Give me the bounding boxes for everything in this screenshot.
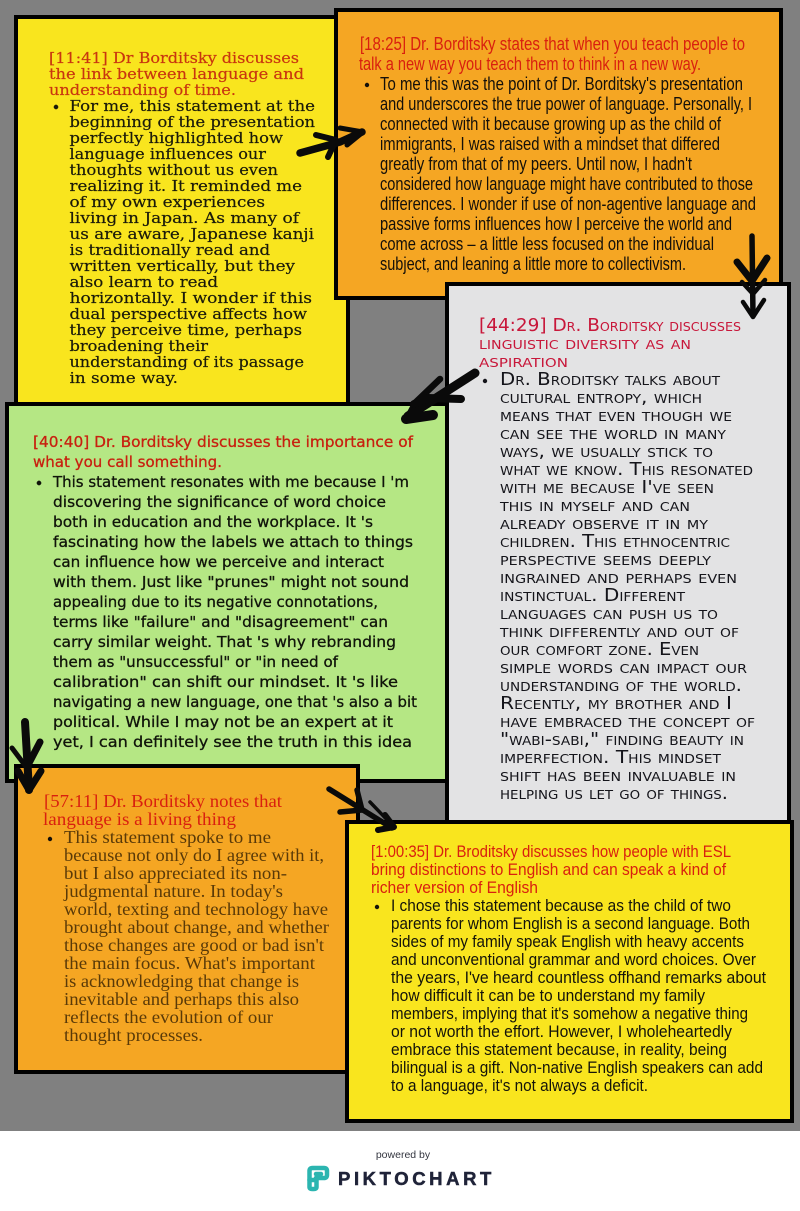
- heading: 11:41: [49, 49, 304, 99]
- text block: 18:25 reflection: [365, 74, 756, 274]
- text block: 18:25 reflection: subject, and leaning a little more to collectivism.: [380, 254, 686, 274]
- text block: 18:25 reflection: greatly from that of my peers. Until now, I hadn't: [380, 154, 692, 174]
- text block: 44:29 reflection: "wabi-sabi," finding beauty in: [500, 730, 744, 750]
- text block: 44:29 reflection: with me because I've seen: [500, 478, 714, 498]
- text block: 44:29 reflection: languages can push us to: [500, 604, 718, 624]
- text block: 44:29 reflection: perspective seems deeply: [500, 550, 712, 570]
- text block: 11:41 reflection: also learn to read: [70, 273, 218, 291]
- text block: 44:29 reflection: instinctual. Different: [500, 586, 686, 606]
- heading: 18:25: [359, 34, 745, 74]
- text block: 57:11 reflection: world, texting and technology have: [64, 899, 328, 919]
- text block: 44:29 reflection: understanding of the world.: [500, 676, 742, 696]
- heading: 1:00:35: bring distinctions to English and can speak a kind of: [371, 860, 726, 879]
- heading: 40:40: [40:40] Dr. Borditsky discusses the importance of: [33, 433, 414, 451]
- text block: 40:40 reflection: carry similar weight. That 's why rebranding: [53, 633, 396, 651]
- text block: 57:11 reflection: is acknowledging that change is: [64, 971, 299, 991]
- text block: 18:25 reflection: connected with it because growing up as the child of: [380, 114, 722, 134]
- text block: 11:41 reflection: us are aware, Japanese kanji: [70, 225, 314, 243]
- text block: 1:00:35 reflection: [375, 896, 766, 1095]
- text block: 57:11 reflection: This statement spoke to me: [64, 827, 271, 847]
- text block: 44:29 reflection: [483, 370, 755, 804]
- text block: 40:40 reflection: navigating a new language, one that 's also a bit: [53, 693, 417, 711]
- panel: 40:40 importance of naming: [7, 404, 447, 781]
- text block: 44:29 reflection: our comfort zone. Even: [500, 640, 699, 660]
- heading: 1:00:35: [1:00:35] Dr. Broditsky discusses how people with ESL: [371, 842, 731, 861]
- text block: 44:29 reflection: simple words can impact our: [500, 658, 747, 678]
- text block: 40:40 reflection: fascinating how the labels we attach to things: [53, 533, 413, 551]
- text block: 44:29 reflection: imperfection. This mindset: [500, 748, 722, 768]
- text block: 18:25 reflection: passive forms influences how I perceive the world and: [380, 214, 732, 234]
- text block: 57:11 reflection: brought about change, and whether: [64, 917, 329, 937]
- heading: 44:29: [44:29] Dr. Borditsky discusses: [479, 316, 741, 336]
- heading: 1:00:35: [371, 842, 731, 897]
- heading: 40:40: [33, 433, 414, 471]
- text block: 40:40 reflection: terms like "failure" and "disagreement" can: [53, 613, 388, 631]
- text block: 40:40 reflection: with them. Just like "prunes" might not sound: [53, 573, 409, 591]
- panel: 44:29 linguistic diversity: [447, 284, 789, 824]
- text block: 44:29 reflection: ingrained and perhaps even: [500, 568, 737, 588]
- text block: 40:40 reflection: This statement resonates with me because I 'm: [52, 473, 409, 491]
- heading: 44:29: aspiration: [479, 352, 568, 372]
- text block: 11:41 reflection: written vertically, but they: [70, 257, 296, 275]
- text block: 18:25 reflection: come across – a little less focused on the individual: [380, 234, 714, 254]
- text block: 18:25 reflection: immigrants, I was raised with a mindset that differed: [380, 134, 720, 154]
- text block: 57:11 reflection: inevitable and perhaps this also: [64, 989, 299, 1009]
- panel: 57:11 language is a living thing: [16, 766, 358, 1072]
- text block: 44:29 reflection: have embraced the concept of: [500, 712, 755, 732]
- text block: 11:41 reflection: language influences our: [70, 145, 267, 163]
- text block: 11:41 reflection: dual perspective affects how: [70, 305, 307, 323]
- text block: 57:11 reflection: those changes are good or bad isn't: [64, 935, 324, 955]
- text block: 1:00:35 reflection: to a language, it's not always a deficit.: [391, 1076, 648, 1095]
- text block: 11:41 reflection: understanding of its passage: [70, 353, 304, 371]
- text block: 11:41 reflection: For me, this statement at the: [70, 97, 315, 115]
- icon: Piktochart logo: [310, 1168, 327, 1189]
- heading: 57:11: [43, 791, 282, 829]
- arrow: orange panel to yellow panel: [329, 789, 394, 830]
- text block: 40:40 reflection: [37, 473, 417, 751]
- footer text: powered by: powered by: [376, 1149, 431, 1161]
- text block: 40:40 reflection: political. While I may not be an expert at it: [53, 713, 393, 731]
- text block: 1:00:35 reflection: sides of my family speak English with heavy accents: [391, 932, 744, 951]
- text block: 11:41 reflection: beginning of the presentation: [70, 113, 315, 131]
- panel: 1:00:35 ESL speakers: [347, 822, 792, 1121]
- text block: 40:40 reflection: them as "unsuccessful" or "in need of: [53, 653, 339, 671]
- heading: 40:40: what you call something.: [33, 453, 222, 471]
- text block: 40:40 reflection: appealing due to its negative connotations,: [53, 593, 378, 611]
- heading: 11:41: [11:41] Dr Borditsky discusses: [49, 49, 299, 67]
- heading: 57:11: language is a living thing: [43, 809, 236, 829]
- text block: 57:11 reflection: thought processes.: [64, 1025, 203, 1045]
- arrow: yellow panel to orange panel: [300, 128, 363, 157]
- wordmark: Piktochart: PIKTOCHART: [338, 1168, 495, 1189]
- text block: 57:11 reflection: [48, 827, 329, 1045]
- text block: 40:40 reflection: can influence how we perceive and interact: [53, 553, 384, 571]
- text block: 44:29 reflection: children. This ethnocentric: [500, 532, 730, 552]
- text block: 40:40 reflection: calibration" can shift our mindset. It 's like: [53, 673, 398, 691]
- heading: 44:29: [479, 316, 741, 372]
- text block: 40:40 reflection: discovering the significance of word choice: [53, 493, 386, 511]
- text block: 1:00:35 reflection: or not worth the effort. However, I wholeheartedly: [391, 1022, 732, 1041]
- text block: 11:41 reflection: in some way.: [70, 369, 178, 387]
- heading: 1:00:35: richer version of English: [371, 878, 538, 897]
- text block: 1:00:35 reflection: bilingual is a gift. Non-native English speakers can add: [391, 1058, 763, 1077]
- text block: 57:11 reflection: reflects the evolution of our: [64, 1007, 273, 1027]
- text block: 11:41 reflection: is traditionally read and: [70, 241, 270, 259]
- text block: 44:29 reflection: can see the world in many: [500, 424, 727, 444]
- text block: 57:11 reflection: because not only do I agree with it,: [64, 845, 324, 865]
- text block: 1:00:35 reflection: parents for whom English is a second language. Both: [391, 914, 750, 933]
- text block: 44:29 reflection: cultural entropy, which: [500, 388, 702, 408]
- text block: 44:29 reflection: Recently, my brother and I: [500, 694, 732, 714]
- heading: 11:41: understanding of time.: [49, 81, 236, 99]
- text block: 11:41 reflection: [54, 97, 315, 387]
- text block: 1:00:35 reflection: the years, I've heard countless offhand remarks about: [391, 968, 766, 987]
- text block: 57:11 reflection: judgmental nature. In today's: [63, 881, 283, 901]
- text block: 11:41 reflection: thoughts without us even: [70, 161, 278, 179]
- heading: 44:29: linguistic diversity as an: [479, 334, 691, 354]
- text block: 40:40 reflection: both in education and the workplace. It 's: [53, 513, 373, 531]
- text block: 11:41 reflection: they perceive time, perhaps: [70, 321, 302, 339]
- text block: 1:00:35 reflection: I chose this statement because as the child of two: [391, 896, 731, 915]
- text block: 11:41 reflection: perfectly highlighted how: [70, 129, 283, 147]
- arrow: orange panel to grey panel: [737, 236, 767, 317]
- heading: 18:25: talk a new way you teach them to think in a new way.: [359, 54, 701, 74]
- text block: 44:29 reflection: what we know. This resonated: [500, 460, 753, 480]
- text block: 11:41 reflection: broadening their: [70, 337, 209, 355]
- text block: 44:29 reflection: already observe it in my: [500, 514, 709, 534]
- arrow: grey panel to green panel: [406, 373, 475, 419]
- arrow: green panel to orange panel: [12, 722, 41, 790]
- text block: 44:29 reflection: ways, we usually stick to: [500, 442, 713, 462]
- text block: 1:00:35 reflection: embrace this statement because, in reality, being: [391, 1040, 727, 1059]
- text block: 44:29 reflection: means that even though we: [500, 406, 732, 426]
- text block: 44:29 reflection: this in myself and can: [499, 496, 690, 516]
- text block: 11:41 reflection: horizontally. I wonder if this: [70, 289, 312, 307]
- text block: 40:40 reflection: yet, I can definitely see the truth in this idea: [53, 733, 412, 751]
- text block: 1:00:35 reflection: members, implying that it's somehow a negative thing: [391, 1004, 748, 1023]
- text block: 57:11 reflection: but I also appreciated its non-: [64, 863, 287, 883]
- text block: 44:29 reflection: shift has been invaluable in: [500, 766, 736, 786]
- text block: 1:00:35 reflection: and unconventional grammar and word choices. Over: [391, 950, 756, 969]
- text block: 1:00:35 reflection: how difficult it can be to understand my family: [391, 986, 705, 1005]
- heading: 57:11: [57:11] Dr. Borditsky notes that: [44, 791, 282, 811]
- text block: 57:11 reflection: the main focus. What's important: [64, 953, 315, 973]
- panel: 18:25 teach people to talk a new way: [336, 10, 781, 298]
- text block: 11:41 reflection: living in Japan. As many of: [70, 209, 301, 227]
- text block: 44:29 reflection: helping us let go of things.: [500, 784, 728, 804]
- text block: 11:41 reflection: of my own experiences: [70, 193, 265, 211]
- heading: 11:41: the link between language and: [49, 65, 304, 83]
- panel: 11:41 language and time: [16, 17, 348, 407]
- text block: 44:29 reflection: think differently and out of: [499, 622, 739, 642]
- text block: 11:41 reflection: realizing it. It reminded me: [70, 177, 302, 195]
- text block: 44:29 reflection: Dr. Broditsky talks about: [500, 370, 721, 390]
- footer: powered by Piktochart: [0, 1131, 800, 1211]
